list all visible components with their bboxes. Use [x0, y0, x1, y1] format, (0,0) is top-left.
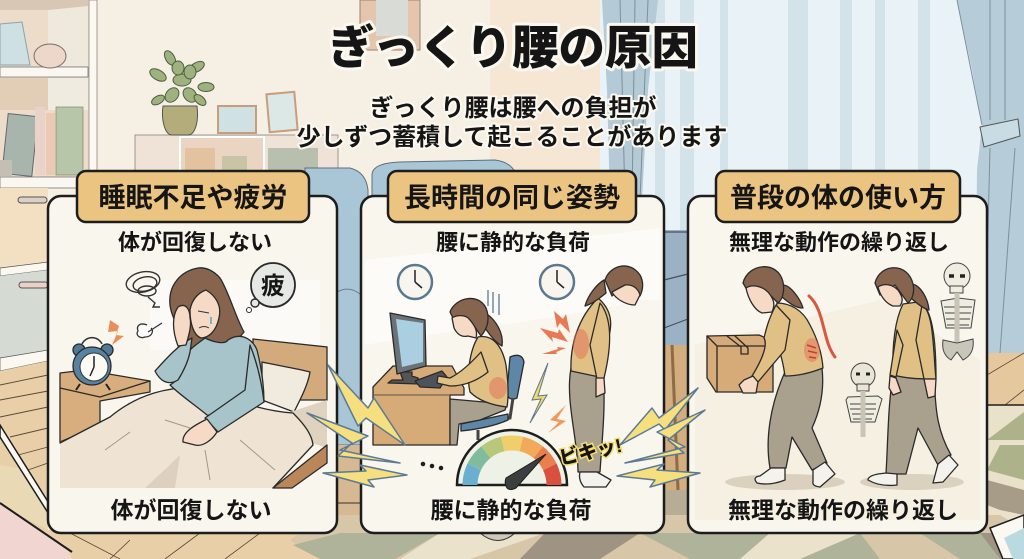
- speech bubble: fatigue: 疲: [261, 273, 285, 300]
- lightning bursts right: [617, 388, 705, 487]
- bottom caption: 腰に静的な負荷: [430, 497, 592, 523]
- sound effect text: ビキッ!: [557, 434, 624, 469]
- background: peach wall: [490, 0, 605, 200]
- tag: heading: 長時間の同じ姿勢: [404, 183, 620, 213]
- icon: orange spark: [548, 405, 566, 433]
- background: wall frame: [360, 0, 420, 50]
- illustration: desk and computer: [373, 313, 464, 445]
- top caption: 腰に静的な負荷: [436, 230, 590, 255]
- faint sofa behind the illustration: [365, 228, 660, 345]
- illustration: woman lifting box: [707, 267, 835, 487]
- tag: heading: [77, 171, 309, 222]
- background: houseplant and low shelf: [135, 49, 338, 175]
- floor shadows: [725, 474, 964, 490]
- chart: load gauge: [457, 430, 567, 490]
- illustration: seated woman at desk: [437, 298, 508, 445]
- bottom caption: 体が回復しない: [110, 497, 272, 523]
- panel: everyday body use: [688, 171, 987, 533]
- background: blue sofa: [300, 160, 688, 445]
- speech bubble: fatigue: [246, 263, 295, 312]
- subtitle text: ぎっくり腰は腰への負担が: [369, 94, 657, 122]
- ellipsis dots: [423, 464, 441, 468]
- icon: motion lines: [488, 290, 499, 315]
- icon: wall clock right: [540, 265, 574, 299]
- tag: heading: 普段の体の使い方: [730, 183, 946, 213]
- title: ぎっくり腰の原因: [328, 22, 698, 74]
- icon: blue lightning: [530, 363, 548, 423]
- subtitle text: [297, 94, 727, 151]
- icon: alarm clock: [73, 338, 113, 390]
- background: window: [600, 0, 1024, 353]
- icon: dizzy swirl: [124, 269, 162, 307]
- tag: heading: 睡眠不足や疲労: [98, 183, 288, 213]
- background: patterned rug: [290, 405, 1024, 559]
- subtitle text: 少しずつ蓄積して起こることがあります: [297, 123, 727, 151]
- illustration: bed and nightstand: [60, 280, 327, 488]
- illustration: skeleton small: [846, 363, 882, 437]
- illustration: chair: [461, 355, 524, 440]
- icon: red pain sparks: [540, 311, 570, 354]
- icon: wall clock left: [398, 265, 432, 299]
- tag: heading: [716, 171, 960, 222]
- illustration: tired woman in bed: [155, 268, 264, 445]
- tag: heading: [388, 171, 636, 222]
- faint table behind the illustration: [695, 300, 980, 520]
- panel: sleep deprivation and fatigue: [48, 171, 337, 533]
- icon: red spine arc: [809, 296, 835, 357]
- icon: sigh puff: [137, 323, 162, 338]
- lightning bursts left: [307, 365, 407, 487]
- top caption: 無理な動作の繰り返し: [729, 230, 949, 255]
- illustration: woman walking upright: [868, 268, 958, 485]
- top caption: 体が回復しない: [118, 230, 272, 255]
- background: left bookshelf: [0, 0, 97, 371]
- illustration: skeleton large: [941, 263, 975, 360]
- illustration: standing woman bending: [569, 266, 643, 487]
- icon: pain spark: [108, 320, 124, 345]
- bottom caption: 無理な動作の繰り返し: [728, 497, 958, 523]
- background: floor and wood furniture: [0, 345, 1024, 559]
- panel: long hours in the same posture: [361, 171, 664, 533]
